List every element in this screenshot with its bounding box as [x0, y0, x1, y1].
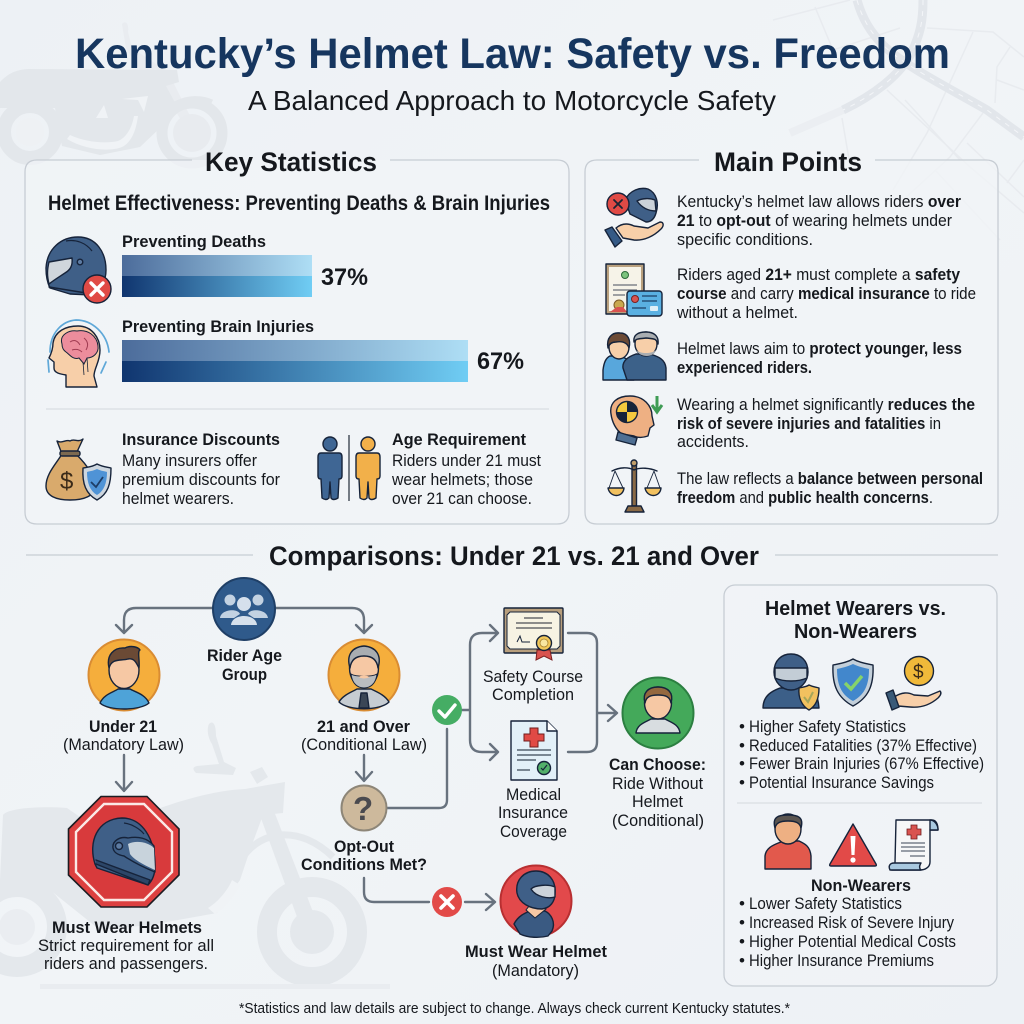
- icon: non-wearer person: [765, 814, 811, 869]
- label: can choose: (Conditional): [612, 811, 704, 830]
- list: wearers: Higher Safety Statistics: [749, 717, 906, 736]
- heading: key statistics: Key Statistics: [205, 147, 377, 177]
- icon: stop sign with helmet: [68, 796, 179, 907]
- list: wearers: •: [739, 717, 745, 736]
- text: insurance discounts: [122, 430, 280, 508]
- text: point 3: experienced riders.: [677, 358, 812, 377]
- list: wearers: •: [739, 754, 745, 773]
- list: wearers: [739, 717, 984, 792]
- icon: helmeted rider with shield: [763, 654, 819, 710]
- list: non-wearers: [739, 894, 956, 970]
- list: non-wearers: •: [739, 913, 745, 932]
- label: must wear helmet: [465, 942, 607, 980]
- text: age requirement: wear helmets; those: [391, 470, 533, 489]
- label: 21 and over: 21 and Over: [317, 717, 410, 736]
- text: insurance discounts: Many insurers offer: [122, 451, 257, 470]
- label: must wear helmets: Strict requirement for all: [38, 936, 214, 955]
- icon: medical document: [511, 721, 557, 780]
- icon: question circle: ?: [353, 790, 373, 827]
- list: non-wearers: Higher Potential Medical Costs: [749, 932, 956, 951]
- icon: hand with coin: $: [913, 662, 924, 683]
- heading: non-wearers: Non-Wearers: [811, 876, 911, 895]
- list: non-wearers: Lower Safety Statistics: [749, 894, 902, 913]
- background: small motorcycle silhouette: [0, 22, 222, 163]
- heading: helmet wearers vs non-wearers: [765, 598, 946, 643]
- text: point 5: [677, 469, 983, 507]
- text: point 1: [677, 192, 961, 249]
- text: point 4: accidents.: [677, 432, 749, 451]
- label: rider age group: [207, 646, 282, 684]
- title: Kentucky’s Helmet Law: Safety vs. Freedom: [75, 30, 950, 78]
- text: point 4: [677, 395, 975, 451]
- icon: hand with coin: [886, 656, 941, 710]
- list: wearers: Reduced Fatalities (37% Effective): [749, 736, 977, 755]
- heading: helmet wearers vs non-wearers: Helmet Wearers vs.: [765, 598, 946, 620]
- label: can choose: Can Choose:: [609, 755, 706, 774]
- panel: helmet wearers vs non-wearers: [724, 585, 997, 986]
- icon: two age figures: [318, 435, 380, 501]
- label: medical insurance coverage: Medical: [506, 785, 561, 804]
- text: point 1: 21 to opt-out of wearing helmets under: [677, 211, 952, 230]
- icon: green check: [432, 695, 462, 725]
- icon: red x: [432, 887, 462, 917]
- label: under 21: (Mandatory Law): [63, 735, 184, 754]
- text: point 5: The law reflects a balance between personal: [677, 469, 983, 488]
- bar: preventing deaths 37%: 37%: [321, 264, 368, 291]
- list: wearers: Fewer Brain Injuries (67% Effective): [749, 754, 984, 773]
- label: can choose: Helmet: [632, 792, 683, 811]
- label: opt-out conditions met: [301, 837, 427, 874]
- icon: rider group: [213, 578, 275, 640]
- text: point 2: [676, 265, 976, 322]
- icon: helmet with x: [46, 237, 111, 303]
- label: opt-out conditions met: Conditions Met?: [301, 855, 427, 874]
- label: safety course completion: Safety Course: [483, 667, 583, 686]
- text: age requirement: Age Requirement: [392, 430, 526, 449]
- label: must wear helmets: [38, 918, 214, 973]
- label: medical insurance coverage: [498, 785, 568, 841]
- text: point 2: Riders aged 21+ must complete a safety: [677, 265, 961, 284]
- list: wearers: •: [739, 736, 745, 755]
- subheading: helmet effectiveness: Helmet Effectiveness: Preventing Deaths & Brain Injuries: [48, 192, 550, 215]
- label: under 21: [63, 717, 184, 754]
- text: age requirement: Riders under 21 must: [392, 451, 541, 470]
- footnote: *Statistics and law details are subject to change. Always check current Kentucky statutes.*: [239, 1000, 790, 1017]
- label: rider age group: Rider Age: [207, 646, 282, 665]
- icon: warning triangle: [830, 824, 876, 866]
- background: large motorcycle silhouette: [0, 722, 390, 989]
- label: medical insurance coverage: Insurance: [498, 803, 568, 822]
- heading: helmet wearers vs non-wearers: Non-Wearers: [794, 621, 917, 643]
- label: must wear helmet: Must Wear Helmet: [465, 942, 607, 961]
- label: can choose: Ride Without: [612, 774, 703, 793]
- label: must wear helmets: Must Wear Helmets: [52, 918, 202, 937]
- flowchart: rider age group: [38, 578, 706, 980]
- label: safety course completion: Completion: [492, 685, 574, 704]
- text: age requirement: [391, 430, 541, 508]
- list: non-wearers: Higher Insurance Premiums: [749, 951, 934, 970]
- text: point 1: specific conditions.: [677, 230, 813, 249]
- icon: certificate: [504, 608, 563, 660]
- label: must wear helmet: (Mandatory): [492, 961, 579, 980]
- icon: question circle: [342, 786, 386, 830]
- list: non-wearers: •: [739, 894, 745, 913]
- label: medical insurance coverage: Coverage: [500, 822, 567, 841]
- label: must wear helmets: riders and passengers.: [44, 954, 208, 973]
- icon: medical scroll: [889, 820, 938, 870]
- text: insurance discounts: Insurance Discounts: [122, 430, 280, 449]
- label: can choose: [609, 755, 706, 830]
- label: rider age group: Group: [222, 665, 267, 684]
- icon: hand holding helmet: [605, 188, 663, 247]
- panel: main points: [585, 147, 998, 524]
- background: road map lines: [773, 0, 1024, 240]
- icon: money bag with shield: [46, 439, 111, 500]
- icon: money bag with shield: $: [60, 468, 73, 495]
- label: 21 and over: (Conditional Law): [301, 735, 427, 754]
- list: non-wearers: •: [739, 932, 745, 951]
- icon: can choose avatar: [622, 678, 694, 748]
- label: 21 and over: [301, 717, 427, 754]
- heading: comparisons: Comparisons: Under 21 vs. 21 and Over: [269, 541, 759, 571]
- icon: helmeted rider: [500, 866, 572, 937]
- text: point 3: [677, 339, 962, 377]
- icon: younger and older riders: [603, 332, 666, 380]
- bar: preventing brain injuries 67%: Preventing Brain Injuries: [122, 317, 314, 336]
- bar: preventing brain injuries 67%: 67%: [477, 348, 524, 375]
- heading: main points: Main Points: [714, 147, 862, 177]
- text: point 3: Helmet laws aim to protect younger, less: [677, 339, 962, 358]
- bar: preventing deaths 37%: [122, 232, 368, 297]
- icon: 21 and over rider avatar: [328, 640, 400, 710]
- list: non-wearers: Increased Risk of Severe Injury: [749, 913, 954, 932]
- bar: preventing deaths 37%: Preventing Deaths: [122, 232, 266, 251]
- label: opt-out conditions met: Opt-Out: [334, 837, 394, 856]
- icon: head with crash dummy target: [611, 396, 662, 445]
- text: insurance discounts: premium discounts for: [122, 470, 280, 489]
- text: point 4: risk of severe injuries and fatalities in: [677, 414, 941, 433]
- list: wearers: •: [739, 773, 745, 792]
- text: point 1: Kentucky’s helmet law allows riders over: [677, 192, 961, 211]
- text: point 2: without a helmet.: [676, 303, 798, 322]
- label: safety course completion: [483, 667, 583, 704]
- icon: shield with check: [833, 659, 873, 706]
- text: point 2: course and carry medical insurance to ride: [677, 284, 976, 303]
- panel: key statistics: [25, 147, 569, 524]
- label: under 21: Under 21: [89, 717, 157, 736]
- bar: preventing brain injuries 67%: [122, 317, 524, 382]
- icon: under 21 rider avatar: [88, 640, 160, 710]
- icon: balance scales: [608, 460, 661, 512]
- text: insurance discounts: helmet wearers.: [122, 489, 234, 508]
- arrows: flowchart connectors: [116, 608, 617, 910]
- list: non-wearers: •: [739, 951, 745, 970]
- subtitle: A Balanced Approach to Motorcycle Safety: [248, 85, 776, 116]
- list: wearers: Potential Insurance Savings: [749, 773, 934, 792]
- text: age requirement: over 21 can choose.: [392, 489, 532, 508]
- icon: head with brain: [48, 320, 109, 387]
- text: point 5: freedom and public health concerns.: [677, 488, 933, 507]
- icon: certificate and card: [606, 264, 662, 316]
- text: point 4: Wearing a helmet significantly reduces the: [677, 395, 975, 414]
